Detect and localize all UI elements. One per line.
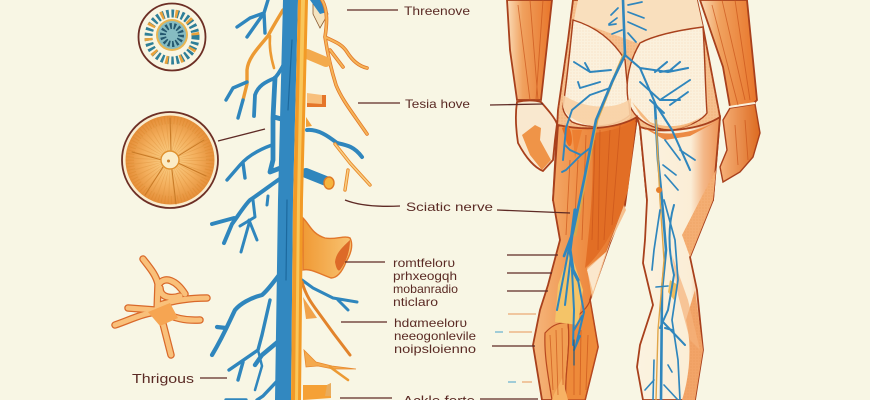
leader lines: [200, 10, 570, 399]
text block: upper small labels: romtfelorυ: [393, 256, 455, 270]
text block: upper small labels: mobanradio: [393, 282, 458, 296]
label: middle nerve: Tesia hove: [405, 97, 470, 111]
body: right arm: [700, 0, 760, 182]
text block: lower small labels: neeogonlevile: [394, 329, 476, 343]
label: sciatic nerve: Sciatic nerve: [406, 200, 493, 214]
label: top nerve: Threenove: [404, 4, 470, 18]
icon: large nerve cross-section: [122, 112, 218, 208]
icon: star-shaped neuron: [115, 259, 207, 355]
body: left arm: [507, 0, 557, 171]
text block: upper small labels: [393, 256, 458, 309]
spinal nerve branches, left side: [212, 0, 288, 400]
spinal cord: [275, 0, 308, 400]
lower spinal branches: [302, 280, 357, 400]
icon: bone process: [303, 218, 352, 278]
text block: lower small labels: hdαmeelorυ: [394, 316, 467, 330]
icon: small cell cross-section: [138, 4, 206, 70]
nerves in the body: [557, 0, 695, 400]
text block: lower small labels: [394, 316, 476, 356]
text block: upper small labels: nticlaro: [393, 295, 438, 309]
spinal nerve branches, right side: [306, 0, 370, 190]
text block: upper small labels: prhxeogqh: [393, 269, 457, 283]
body: right leg: [637, 117, 720, 400]
body: left leg: [533, 117, 637, 400]
text block: lower small labels: noipsloienno: [394, 342, 476, 356]
body: torso and hips: [553, 0, 720, 200]
label: thrigous: Thrigous: [132, 371, 195, 386]
